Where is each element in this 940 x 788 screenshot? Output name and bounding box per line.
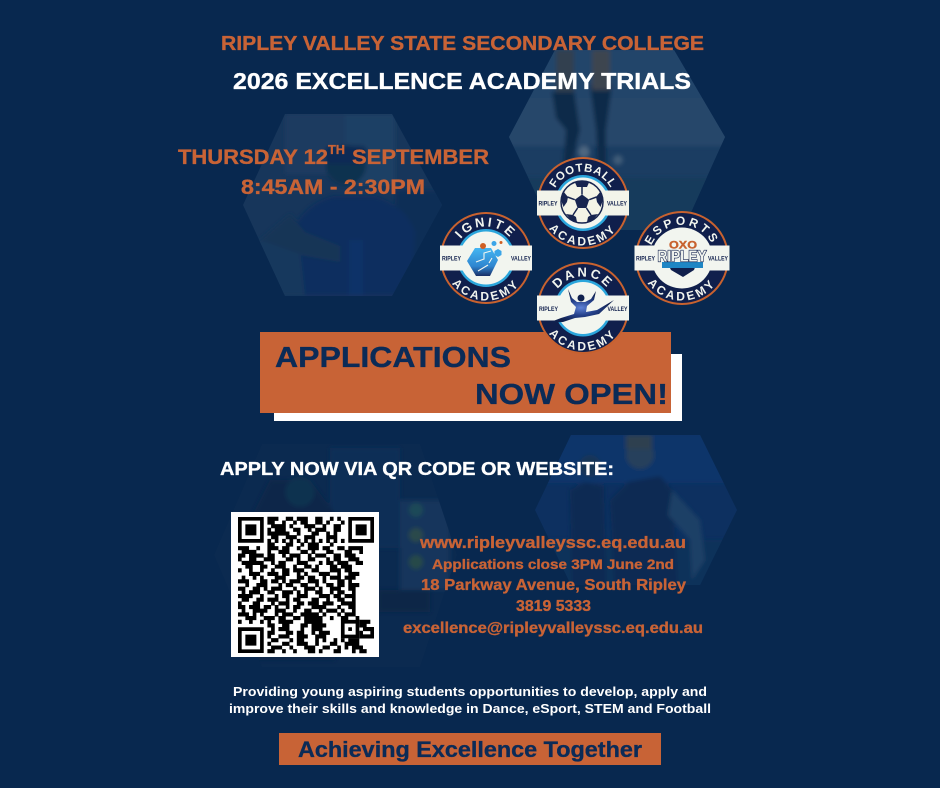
- badge: esports academy: ESPORTS: [644, 216, 718, 245]
- contact details: excellence@ripleyvalleyssc.eq.edu.au: [403, 620, 703, 637]
- applications banner white shadow: [274, 354, 682, 421]
- date and time: 8:45AM - 2:30PM: [241, 175, 425, 199]
- badge: football academy: VALLEY: [607, 202, 627, 208]
- date and time: [178, 143, 489, 199]
- photo hexagon: VR student: [240, 112, 445, 298]
- badge: dance academy: VALLEY: [608, 307, 628, 313]
- badge: ignite academy: [440, 212, 532, 304]
- description text: improve their skills and knowledge in Dance, eSport, STEM and Football: [229, 701, 711, 716]
- badge: esports academy: ACADEMY: [648, 280, 713, 300]
- icon: esports logo: OXO: [669, 240, 698, 252]
- badge: dance academy: ACADEMY: [548, 330, 614, 350]
- badge: football academy: RIPLEY: [538, 202, 558, 208]
- badge: dance academy: RIPLEY: [539, 307, 558, 313]
- date and time: THURSDAY 12: [178, 145, 328, 169]
- date and time: TH: [328, 143, 345, 157]
- badge: football academy: FOOTBALL: [549, 163, 614, 188]
- badge: dance academy: DANCE: [552, 268, 612, 288]
- icon: esports logo: RIPLEY: [658, 248, 707, 266]
- contact details: 18 Parkway Avenue, South Ripley: [421, 577, 686, 594]
- badge: esports academy: VALLEY: [708, 256, 728, 262]
- badge: football academy: [537, 157, 629, 249]
- icon: soccer ball: [561, 181, 603, 223]
- badge: dance academy: [537, 262, 629, 352]
- description text: Providing young aspiring students opportunities to develop, apply and: [233, 684, 707, 699]
- photo hexagon: football players: [505, 48, 730, 233]
- description text: [229, 684, 711, 716]
- banner text: applications: APPLICATIONS: [275, 342, 511, 374]
- photo hexagon: esports computers: [270, 448, 452, 660]
- badge: football academy: ACADEMY: [548, 224, 614, 246]
- badge: ignite academy: RIPLEY: [442, 256, 461, 262]
- photo hexagon: dance students: [532, 433, 740, 590]
- infographic canvas: [178, 36, 737, 765]
- icon: circuit hexagon: [467, 241, 502, 276]
- heading: apply now: APPLY NOW VIA QR CODE OR WEBSITE:: [220, 458, 614, 479]
- icon: dancer silhouette: [548, 289, 614, 323]
- applications banner: [260, 332, 671, 413]
- contact details: 3819 5333: [516, 598, 591, 615]
- title: college name: RIPLEY VALLEY STATE SECONDARY COLLEGE: [221, 32, 704, 55]
- contact details: Applications close 3PM June 2nd: [432, 556, 674, 572]
- QR code: [231, 512, 379, 657]
- slogan button: Achieving Excellence Together: [298, 737, 642, 762]
- badge: ignite academy: VALLEY: [511, 256, 531, 262]
- badge: esports academy: [634, 211, 730, 305]
- banner text: now open: NOW OPEN!: [475, 379, 668, 411]
- heading: academy trials: 2026 EXCELLENCE ACADEMY TRIALS: [233, 68, 691, 94]
- contact details: [403, 533, 703, 637]
- badge: ignite academy: IGNITE: [454, 218, 516, 238]
- badge: esports academy: RIPLEY: [636, 256, 655, 262]
- date and time: SEPTEMBER: [352, 145, 489, 169]
- badge: ignite academy: ACADEMY: [452, 280, 516, 300]
- contact details: www.ripleyvalleyssc.eq.edu.au: [419, 533, 686, 552]
- icon: esports logo: [658, 240, 707, 277]
- slogan button: [279, 733, 661, 765]
